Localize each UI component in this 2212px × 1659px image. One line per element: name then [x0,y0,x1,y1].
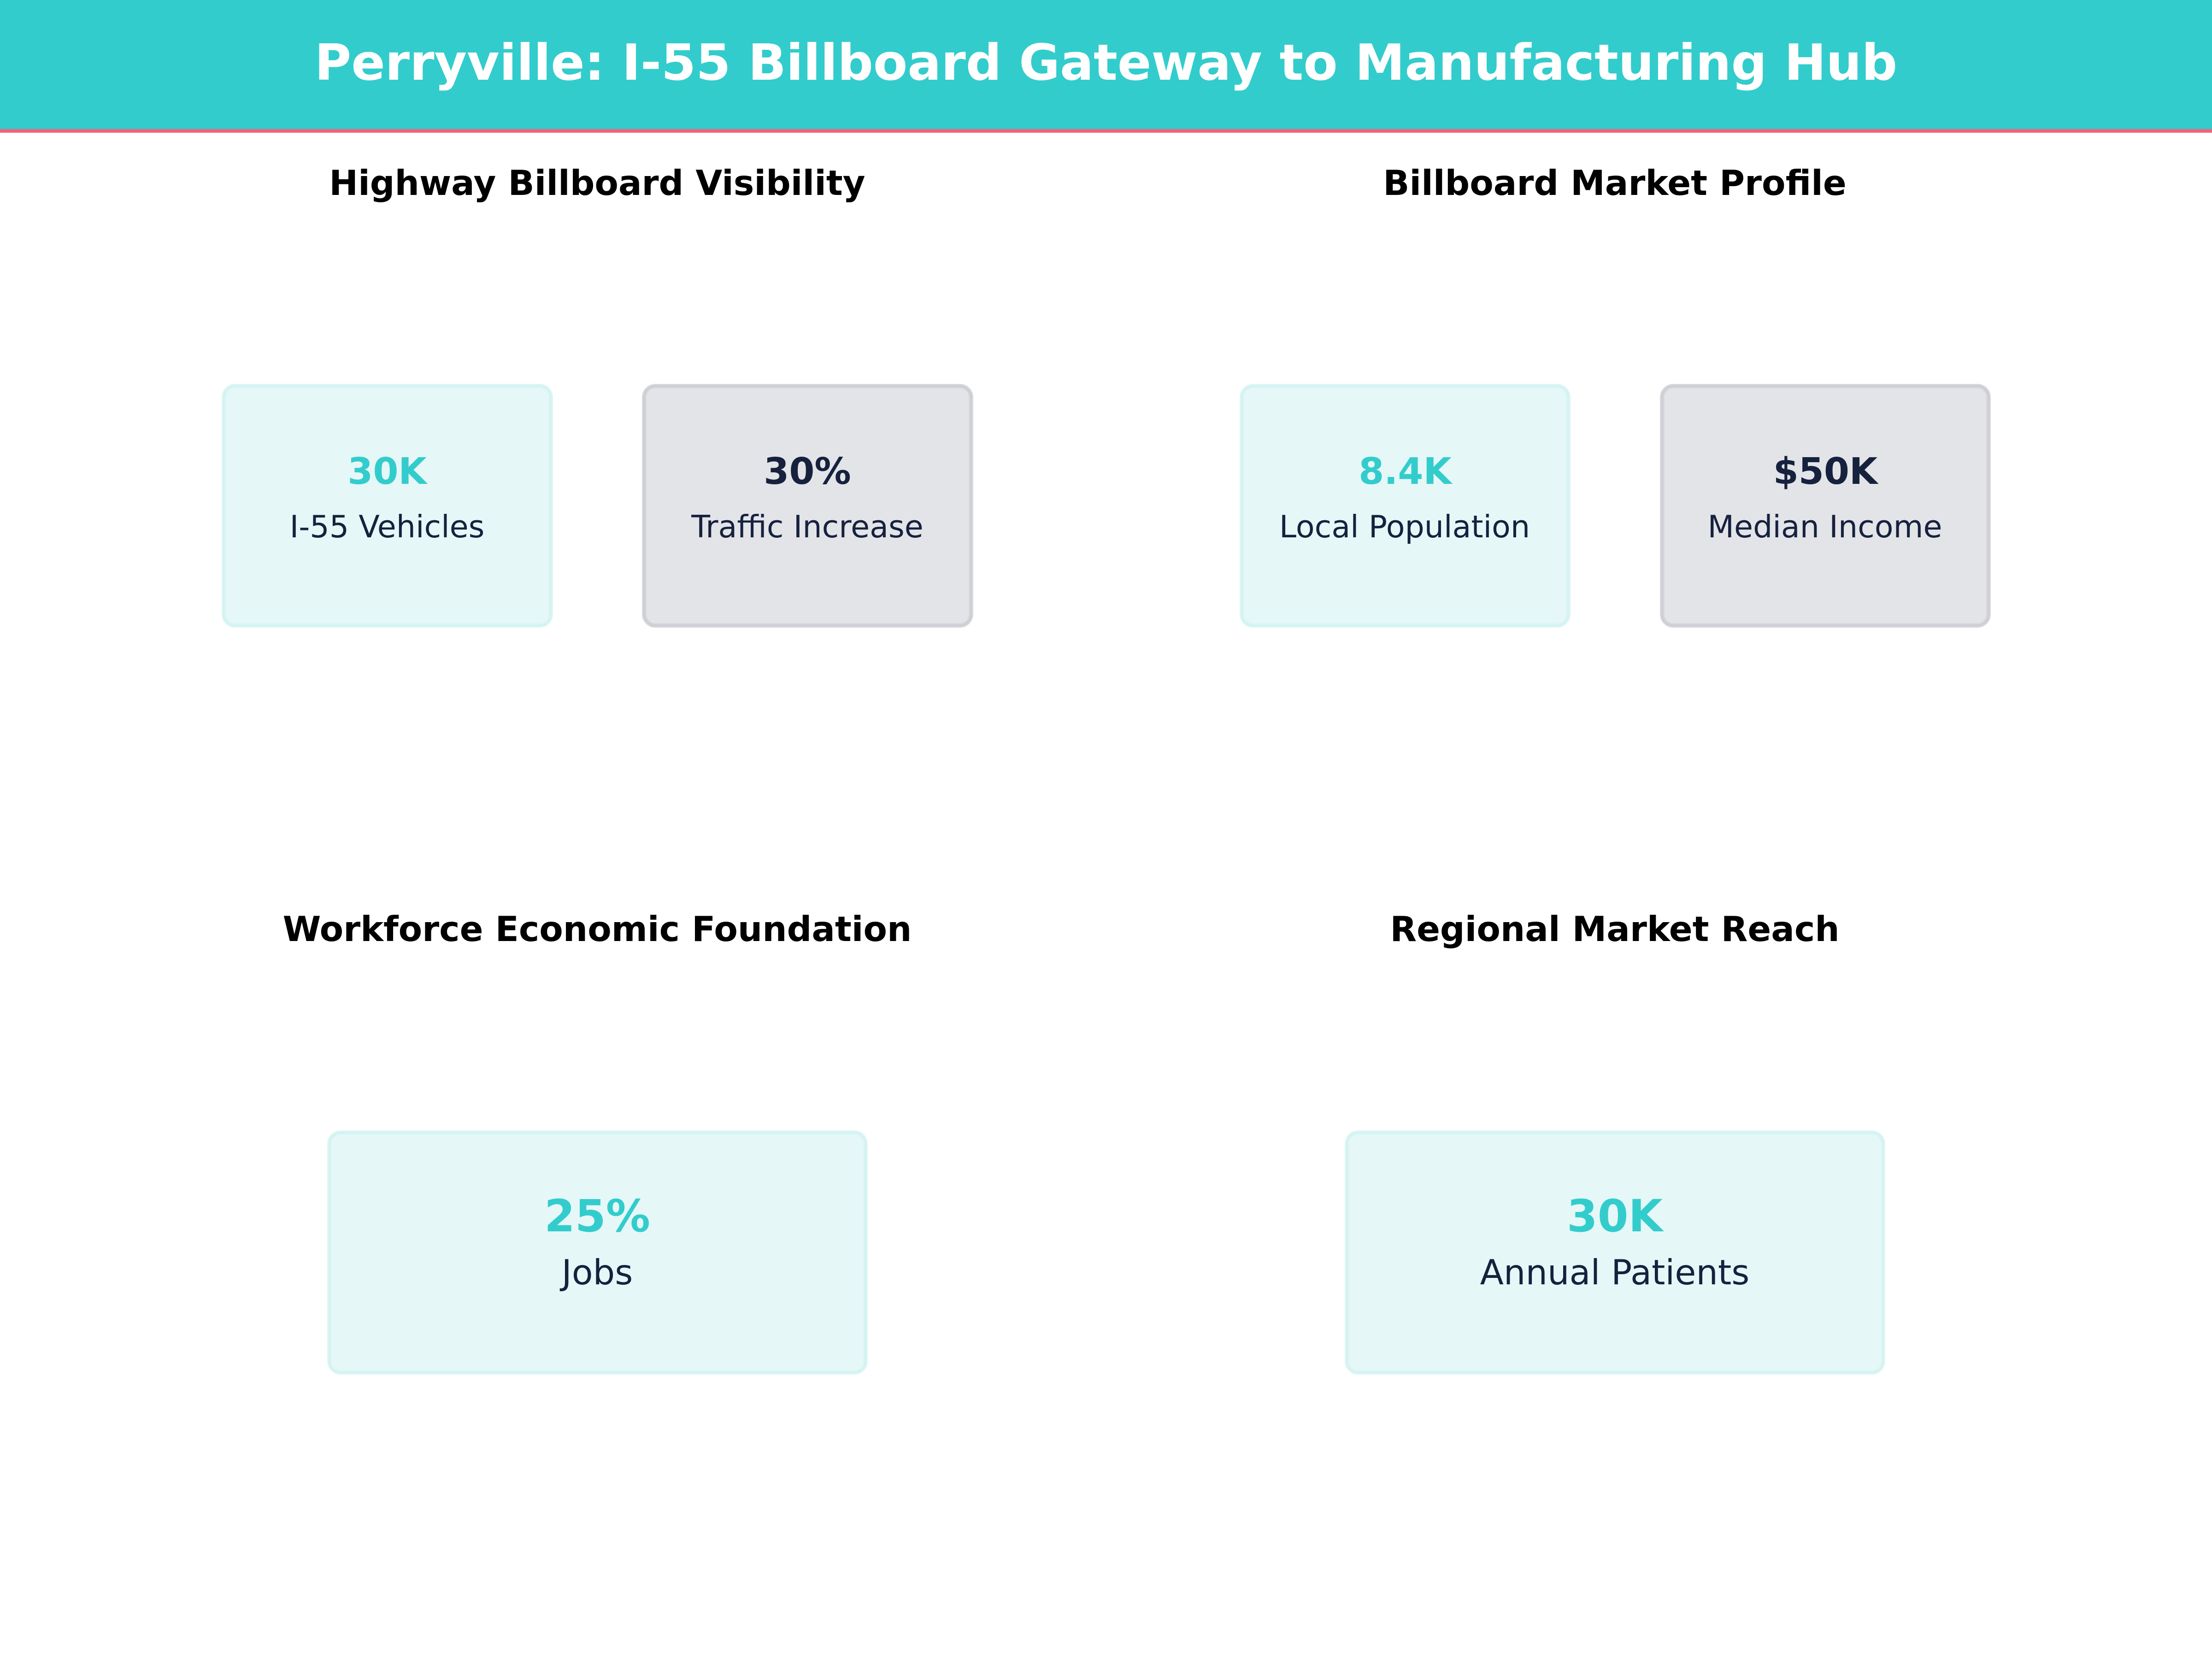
stat card: I-55 vehicles: 30K [347,450,428,493]
panel: regional market reach [1347,909,1883,1372]
stat card: jobs: Jobs [560,1252,633,1293]
stat card: median income: Median Income [1708,509,1942,545]
stat card: annual patients: Annual Patients [1480,1252,1749,1293]
stat card: annual patients [1347,1133,1883,1372]
stat card: traffic increase [644,386,971,625]
heading: billboard market profile: Billboard Market Profile [1383,163,1847,203]
stat card: jobs: 25% [544,1190,650,1242]
stat card: annual patients: 30K [1567,1190,1665,1242]
heading: workforce economic foundation: Workforce Economic Foundation [283,909,912,949]
stat card: jobs [329,1133,865,1372]
stat card: traffic increase: Traffic Increase [691,509,924,545]
panel: billboard market profile [1242,163,1988,625]
stat card: local population: 8.4K [1359,450,1453,493]
heading: highway billboard visibility: Highway Billboard Visibility [329,163,865,203]
title: Perryville: I-55 Billboard Gateway to Manufacturing Hub [315,33,1897,92]
stat card: traffic increase: 30% [764,450,851,493]
heading: regional market reach: Regional Market Reach [1390,909,1840,949]
stat card: median income [1662,386,1988,625]
panel: workforce economic foundation [283,909,912,1372]
stat card: local population: Local Population [1279,509,1530,545]
stat card: median income: $50K [1773,450,1879,493]
header banner [0,0,2212,133]
stat card: local population [1242,386,1568,625]
stat card: I-55 vehicles: I-55 Vehicles [290,509,484,545]
stat card: I-55 vehicles [224,386,551,625]
panel: highway billboard visibility [224,163,971,625]
